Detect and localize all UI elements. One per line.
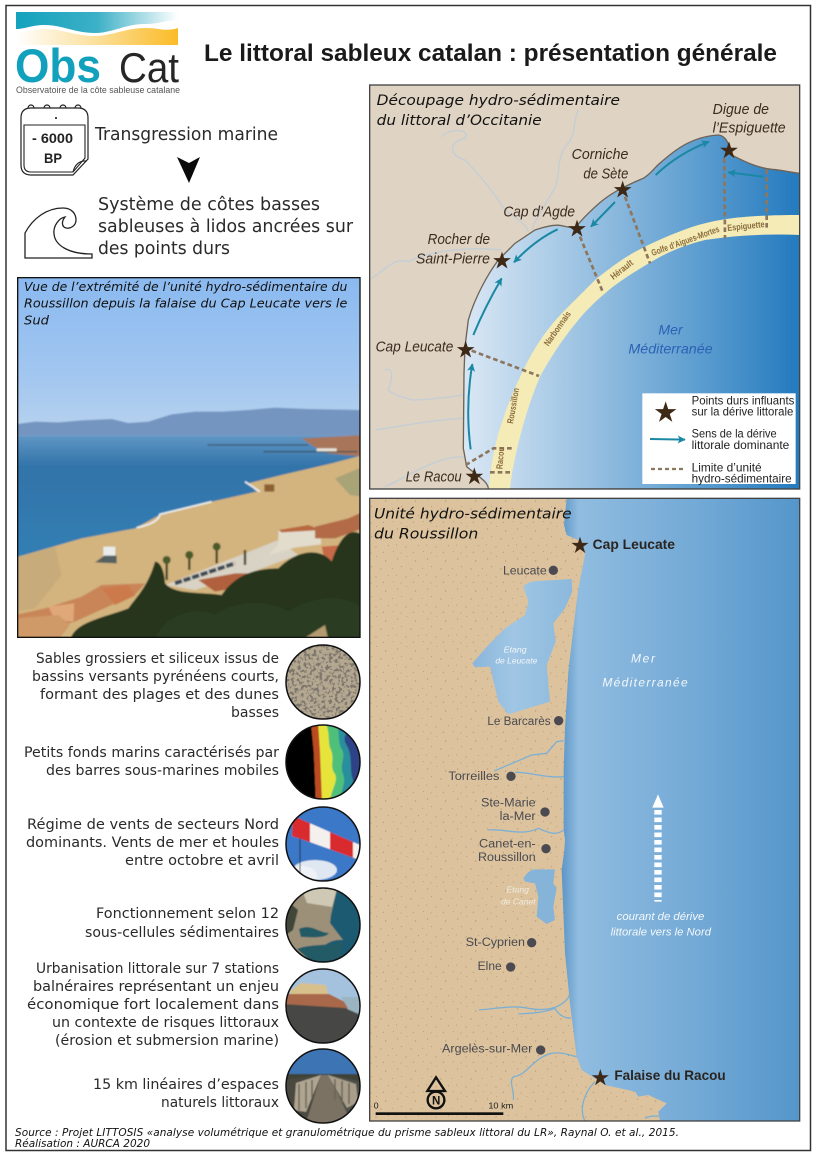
unit names on band: Narbonnais [542, 309, 573, 348]
icon: calendar: BP [44, 150, 62, 166]
place labels: Corniche [572, 147, 628, 163]
unit names on band: Roussillon [505, 387, 521, 424]
text: sous-cellules: sous-cellules sédimentaires [85, 925, 279, 941]
text: sables: Sables grossiers et siliceux issus de [36, 651, 279, 667]
text: vents: dominants. Vents de mer et houles [26, 835, 279, 851]
icon: windsock [285, 806, 361, 882]
towns: St-Cyprien [466, 935, 525, 949]
text: fonds marins [24, 745, 279, 779]
unit names on band: Espiguette [727, 219, 765, 233]
photo caption: Sud [24, 313, 49, 327]
towns: Elne [478, 959, 502, 973]
photo caption: Roussillon depuis la falaise du Cap Leucate vers le [24, 297, 347, 311]
towns: Argelès-sur-Mer [442, 1042, 532, 1056]
source and credits: Source : Projet LITTOSIS «analyse volumétrique et granulométrique du prisme sableux littoral du LR», Raynal O. et al., 2015. [15, 1127, 679, 1139]
hard points [571, 536, 726, 1085]
text: urbanisation: Urbanisation littorale sur 7 stations [36, 961, 279, 977]
logo: Cat [119, 44, 179, 91]
sea label: Mer [631, 652, 656, 666]
towns: Ste-Marie [481, 796, 536, 810]
towns: Canet-en- [479, 837, 536, 851]
icon: urban beach photo [283, 966, 363, 1046]
arrow: littoral drift [652, 794, 664, 902]
text: espaces naturels: 15 km linéaires d’espaces [93, 1077, 279, 1093]
scale bar: 10 km [488, 1100, 513, 1110]
legend: littorale dominante [692, 439, 789, 452]
legend: Limite d’unité [692, 462, 762, 475]
sea [562, 498, 800, 1121]
place labels: Rocher de [428, 232, 490, 248]
place labels [376, 102, 786, 486]
unit limits [466, 158, 767, 472]
text: vents: Régime de vents de secteurs Nord [27, 817, 279, 833]
source and credits: Réalisation : AURCA 2020 [15, 1138, 150, 1150]
text: urbanisation: un contexte de risques littoraux [52, 1015, 279, 1031]
text: espaces naturels: naturels littoraux [161, 1095, 279, 1111]
text: sables [32, 651, 279, 721]
photo caption [24, 280, 348, 327]
towns [442, 563, 563, 1056]
text: système de côtes: sableuses à lidos ancrées sur [98, 216, 354, 237]
panel: photo of the beach [15, 275, 363, 640]
panel: map of Roussillon unit [370, 498, 800, 1121]
legend: Sens de la dérive [692, 428, 777, 441]
drift caption: littorale vers le Nord [611, 926, 712, 938]
map title: Découpage hydro-sédimentaire [377, 93, 620, 109]
icon: aerial photo [283, 885, 363, 965]
hard points: Cap Leucate [593, 536, 675, 552]
sea label [602, 654, 688, 686]
sea label: Mer [658, 321, 684, 337]
étang de Canet [501, 869, 557, 924]
towns: Roussillon [478, 850, 536, 864]
map title [377, 93, 620, 125]
drift caption: courant de dérive [617, 911, 704, 923]
rivers [372, 110, 578, 487]
map title: du littoral d’Occitanie [377, 113, 542, 129]
étang de Leucate [472, 579, 572, 714]
drift arrows [468, 142, 763, 449]
text: sous-cellules [85, 906, 279, 941]
icon: bathymetry [283, 722, 363, 802]
unit names on band: Golfe d’Aigues-Mortes [650, 224, 721, 258]
place labels: l’Espiguette [713, 121, 786, 137]
text: sables: basses [231, 705, 279, 721]
text: vents: entre octobre et avril [125, 853, 279, 869]
map title [374, 506, 571, 538]
place labels: de Sète [583, 166, 628, 182]
text: espaces naturels [93, 1077, 279, 1111]
stars [457, 141, 738, 484]
text: fonds marins: des barres sous-marines mobiles [46, 763, 279, 779]
sea [463, 135, 800, 489]
towns: Le Barcarès [487, 714, 551, 728]
text: urbanisation: balnéraires représentant un enjeu [33, 979, 279, 995]
icon: calendar: - 6000 [32, 130, 73, 146]
text: urbanisation [27, 961, 279, 1049]
étang de Leucate: Etang [504, 644, 527, 654]
logo: Observatoire de la côte sableuse catalane [16, 85, 180, 96]
photo caption: Vue de l’extrémité de l’unité hydro-sédimentaire du [24, 280, 348, 294]
text: système de côtes: des points durs [98, 238, 230, 259]
sea label: Méditerranée [602, 675, 688, 689]
text: urbanisation: économique fort localement dans [27, 997, 279, 1013]
text: sous-cellules: Fonctionnement selon 12 [96, 906, 279, 922]
logo: Obs [15, 39, 101, 92]
legend: sur la dérive littorale [692, 406, 793, 419]
unit names on band: Hérault [608, 258, 635, 282]
legend: hydro-sédimentaire [692, 473, 792, 486]
map title: Unité hydro-sédimentaire [374, 506, 572, 522]
text: système de côtes [98, 194, 354, 259]
title: Le littoral sableux catalan : présentation générale [204, 40, 777, 67]
hard points: Falaise du Racou [614, 1067, 726, 1083]
north arrow: N [432, 1094, 440, 1108]
source and credits [15, 1127, 679, 1150]
place labels: Le Racou [406, 470, 462, 486]
towns: la-Mer [500, 809, 536, 823]
icon: wave [25, 208, 92, 258]
north arrow [427, 1077, 445, 1108]
place labels: Digue de [713, 102, 769, 118]
text: sables: bassins versants pyrénéens courts, [32, 669, 279, 685]
legend [642, 393, 796, 486]
logo [15, 12, 180, 96]
étang de Leucate: de Leucate [495, 655, 538, 665]
towns: Torreilles [448, 769, 499, 783]
sea label [628, 325, 712, 354]
drift caption [610, 912, 712, 936]
sea label: Méditerranée [628, 340, 713, 356]
unit names on band [494, 219, 765, 470]
place labels: Cap d’Agde [503, 205, 575, 221]
icon: calendar [21, 105, 88, 175]
scale bar: 0 [374, 1100, 379, 1110]
unit names on band: Racou [494, 447, 506, 470]
étang de Canet: de Canet [501, 896, 536, 906]
place labels: Saint-Pierre [416, 251, 490, 267]
text: urbanisation: (érosion et submersion marine) [55, 1033, 279, 1049]
towns: Leucate [503, 563, 547, 577]
text: vents [26, 817, 279, 869]
text: système de côtes: Système de côtes basses [98, 194, 320, 215]
text: sables: formant des plages et des dunes [40, 687, 279, 703]
legend: Points durs influants [692, 394, 794, 407]
text: transgression marine: Transgression marine [94, 124, 278, 145]
place labels: Cap Leucate [376, 340, 453, 356]
sand band [489, 215, 800, 489]
panel: map of Occitanie coast [370, 85, 800, 489]
scale bar [374, 1102, 513, 1115]
icon: sand photo [285, 644, 361, 720]
icon: boardwalk photo [283, 1046, 363, 1126]
arrow: down [177, 157, 200, 183]
map title: du Roussillon [374, 526, 478, 542]
étang de Canet: Etang [506, 885, 529, 895]
rivers [479, 741, 658, 1121]
text: fonds marins: Petits fonds marins caractérisés par [24, 745, 279, 761]
